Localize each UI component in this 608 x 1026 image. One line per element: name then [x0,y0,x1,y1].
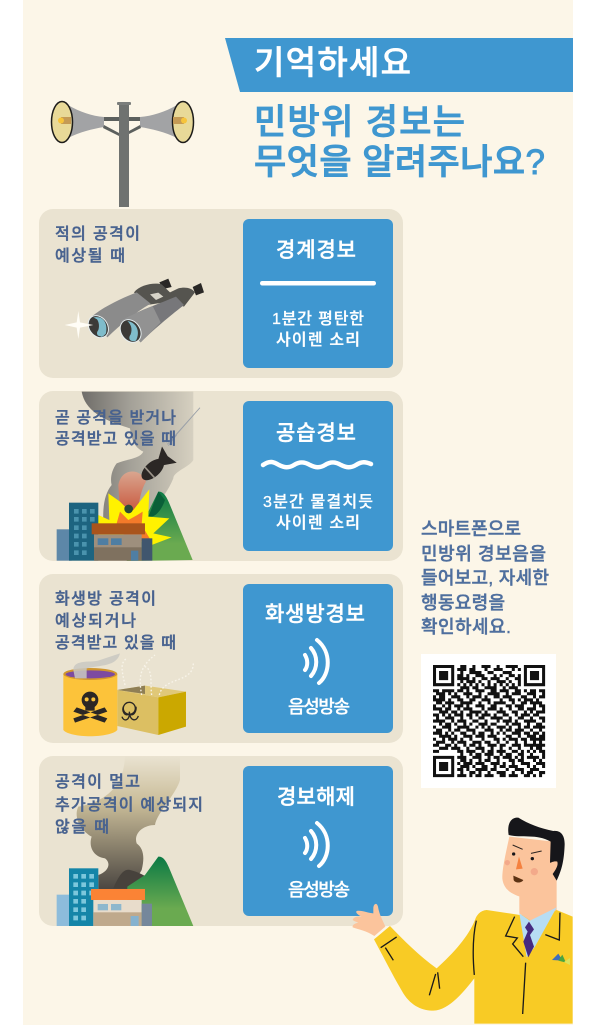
text: smartphone guidance [421,519,549,637]
panel: 경계경보 [39,209,403,378]
neck [519,877,557,923]
icon: binoculars [65,279,204,347]
situation text: 추가공격이 예상되지 [55,796,203,814]
hair [508,818,565,881]
situation text: 않을 때 [55,818,109,836]
situation text: 공격받고 있을 때 [55,634,176,652]
shirt and tie [519,907,557,957]
icon: sound waves [305,823,328,866]
siren box [243,766,393,916]
illustration: bombing [57,392,200,561]
QR code [421,654,556,788]
situation text: 예상되거나 [55,612,136,630]
situation text: 적의 공격이 [55,225,140,243]
siren box [243,219,393,368]
situation text [55,773,203,836]
illustration: toxic barrel and biohazard box [63,653,193,736]
situation text: 예상될 때 [55,247,125,265]
banner [225,38,573,92]
title: 민방위 경보는 [254,103,465,142]
icon: sound waves [305,640,328,683]
siren box: 음성방송 [288,880,350,900]
situation text: 공격받고 있을 때 [55,430,176,448]
jacket [374,910,573,1024]
title [254,103,545,182]
text: smartphone guidance: 들어보고, 자세한 [421,568,549,588]
panel: 공습경보 [39,391,403,561]
text: smartphone guidance: 행동요령을 [421,593,505,613]
situation text: 화생방 공격이 [55,590,156,608]
siren box: 1분간 평탄한 [272,310,364,328]
text: smartphone guidance: 확인하세요. [421,617,511,637]
siren box: 경계경보 [276,239,356,262]
character: presenter in yellow jacket [353,818,573,1024]
siren box: 3분간 물결치듯 [263,493,373,511]
text: smartphone guidance: 민방위 경보음을 [421,544,546,564]
situation text: 곧 공격을 받거나 [55,409,176,427]
jacket lines [381,913,560,1014]
siren box: 공습경보 [276,422,356,445]
siren box: 사이렌 소리 [276,514,360,532]
siren box: 경보해제 [277,786,355,809]
panel: 경보해제 [39,756,403,926]
facial features [513,845,542,853]
situation text [55,409,176,448]
icon: siren pole [52,102,194,207]
situation text [55,225,140,265]
siren box [243,584,393,733]
title: 무엇을 알려주나요? [254,143,545,182]
siren box: 화생방경보 [265,603,365,626]
situation text: 공격이 멀고 [55,773,140,791]
siren box: 사이렌 소리 [276,331,360,349]
hand [353,904,385,936]
panel: 화생방경보 [39,574,403,743]
banner: 기억하세요 [254,44,411,81]
illustration: smoke after attack [57,757,193,926]
pocket square [552,954,563,961]
text: smartphone guidance: 스마트폰으로 [421,519,521,539]
siren box [243,401,393,551]
siren box: 음성방송 [288,697,350,717]
face [502,837,558,897]
situation text [55,590,176,652]
